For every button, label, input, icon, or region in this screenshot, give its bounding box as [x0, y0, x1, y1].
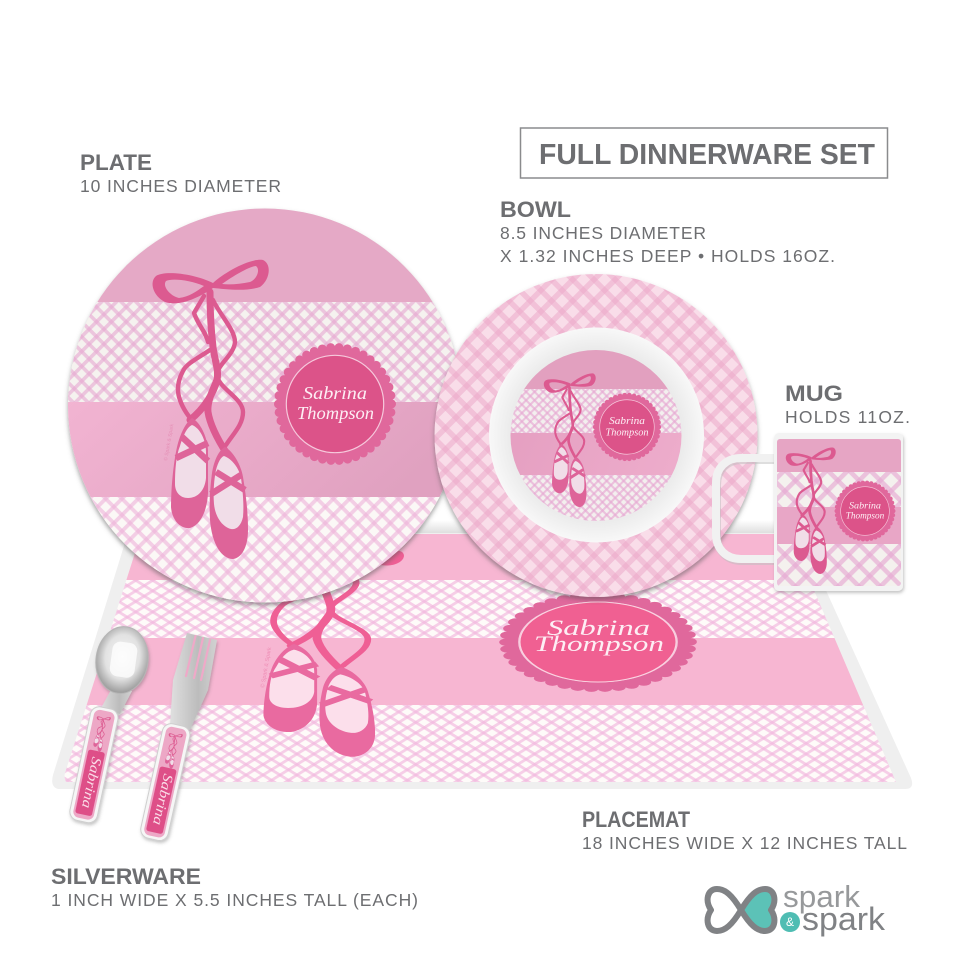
mug: [716, 433, 903, 591]
label: placemat: 18 INCHES WIDE X 12 INCHES TALL: [582, 833, 907, 853]
label: mug: [785, 381, 910, 427]
bowl inner white wall: [489, 328, 704, 542]
label: bowl: X 1.32 INCHES DEEP • HOLDS 16OZ.: [500, 246, 835, 266]
label: placemat: [582, 807, 907, 853]
mug name medallion: Sabrina: [849, 500, 882, 510]
spoon handle: Sabrina: [78, 755, 103, 809]
bowl name medallion: [595, 395, 659, 459]
mug name medallion: [837, 483, 893, 539]
mug stripes: [777, 439, 901, 586]
fork: [139, 633, 217, 842]
bowl rim: [434, 274, 758, 597]
label: plate: [80, 150, 281, 196]
label: placemat: PLACEMAT: [582, 807, 690, 832]
plate copyright: © Spark & Spark: [162, 423, 176, 461]
mug body: [774, 433, 903, 591]
logo: spark and spark: spark: [802, 901, 886, 937]
label: silverware: SILVERWARE: [51, 864, 201, 889]
label: plate: PLATE: [80, 150, 152, 175]
plate name medallion: Sabrina: [303, 383, 367, 403]
bowl name medallion: Sabrina: [609, 416, 645, 427]
logo ampersand badge: [780, 912, 800, 932]
mug ballet shoes: [786, 447, 836, 574]
label: silverware: 1 INCH WIDE X 5.5 INCHES TALL (EACH): [51, 890, 418, 910]
bowl stripes: [510, 350, 682, 521]
placemat: [50, 517, 912, 789]
placemat name medallion: Sabrina: [547, 615, 650, 640]
placemat name medallion: [506, 596, 690, 688]
plate name medallion: [278, 348, 392, 460]
title box: full dinnerware set: [520, 128, 888, 178]
label: plate: 10 INCHES DIAMETER: [80, 176, 281, 196]
placemat ballet shoes: [237, 517, 405, 757]
placemat name medallion: Thompson: [534, 631, 664, 656]
placemat artwork: [50, 530, 910, 785]
plate ballet shoes: [153, 260, 269, 559]
spoon handle: [68, 705, 120, 824]
spoon: [68, 623, 152, 824]
label: bowl: 8.5 INCHES DIAMETER: [500, 223, 706, 243]
label: silverware: [51, 864, 418, 910]
label: bowl: [500, 197, 835, 266]
plate stripes: [60, 205, 470, 607]
plate: [60, 205, 470, 607]
placemat clear border: [52, 533, 912, 789]
placemat back glow: [135, 520, 795, 534]
bowl: [434, 274, 758, 597]
plate base and shadow: [68, 208, 462, 602]
plate name medallion: Thompson: [297, 403, 374, 423]
bowl ballet shoes: [544, 373, 596, 507]
title box: full dinnerware set: FULL DINNERWARE SET: [539, 139, 875, 171]
fork head: [170, 633, 217, 730]
fork handle: [139, 722, 192, 842]
logo ampersand badge: &: [786, 915, 794, 929]
placemat ballet shoes: © Spark & Spark: [259, 646, 273, 688]
mug handle: [716, 458, 777, 561]
fork handle: Sabrina: [149, 772, 175, 826]
label: bowl: BOWL: [500, 197, 571, 222]
logo wordmark: spark: [783, 879, 860, 914]
bowl name medallion: Thompson: [605, 427, 649, 438]
logo: spark and spark: [708, 879, 886, 937]
mug name medallion: Thompson: [846, 510, 885, 520]
logo icon: infinity hearts: [708, 889, 774, 931]
spoon bowl: [92, 623, 152, 697]
label: mug: MUG: [785, 381, 843, 406]
spoon neck: [100, 688, 132, 714]
label: mug: HOLDS 11OZ.: [785, 407, 910, 427]
